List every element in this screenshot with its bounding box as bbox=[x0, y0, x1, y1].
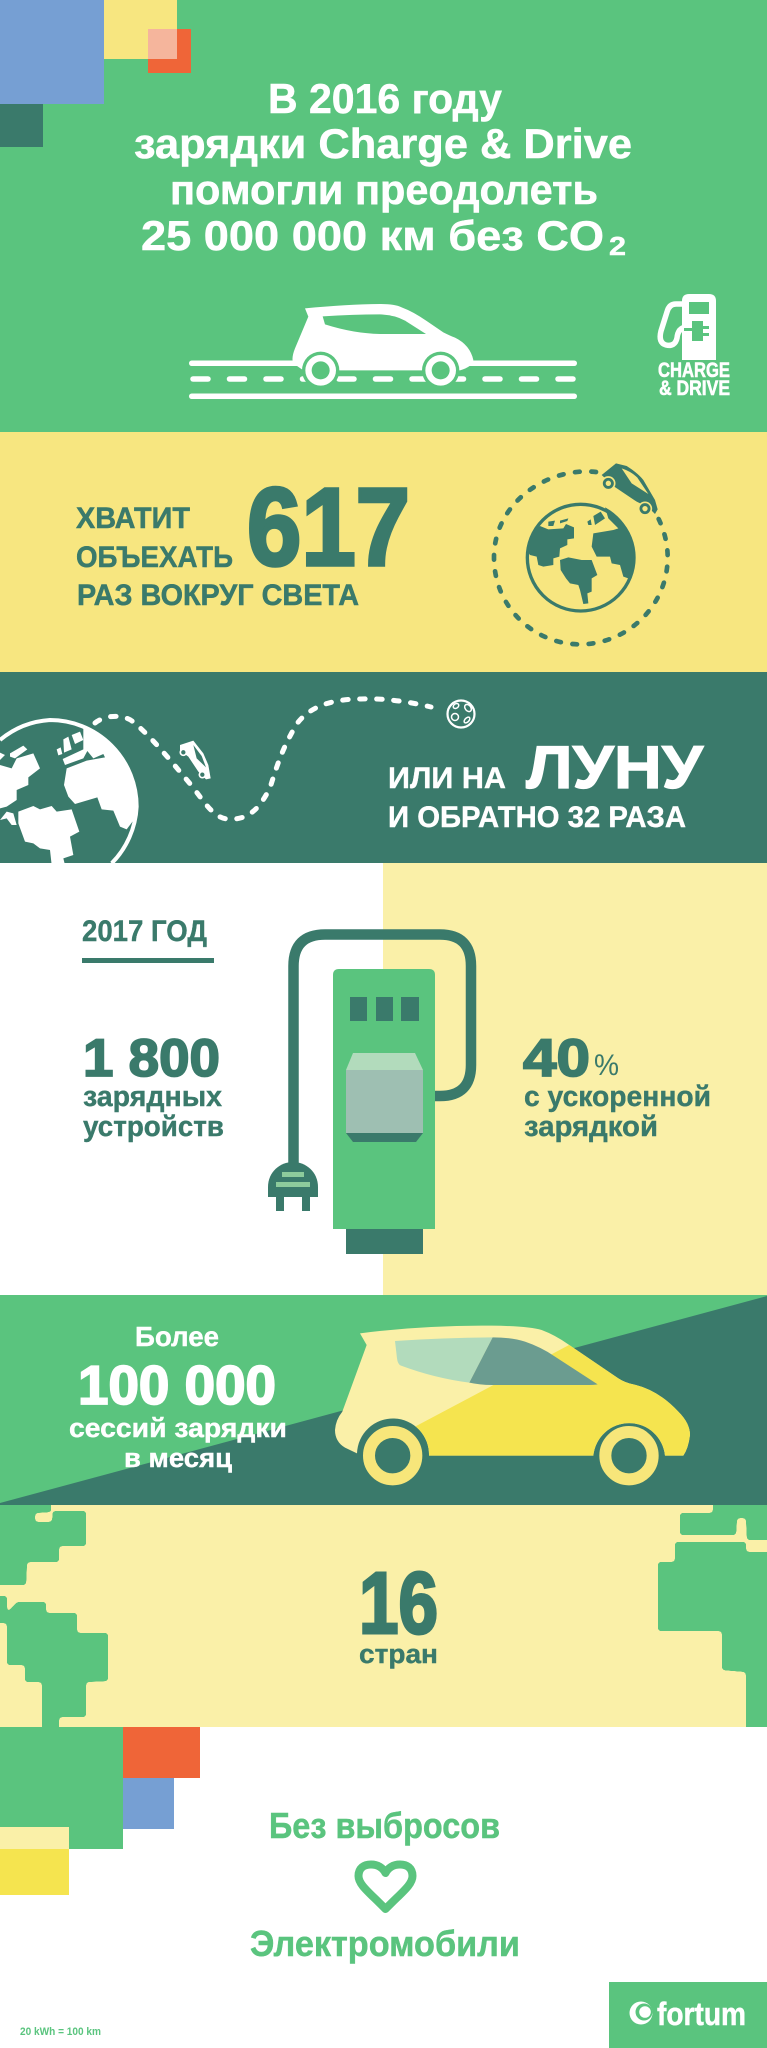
panel: 100 000 sessions bbox=[0, 1295, 767, 1505]
orbit bbox=[494, 471, 668, 644]
stat: 16 countries: стран bbox=[359, 1639, 438, 1669]
stat: 1800 chargers: 1 800 bbox=[83, 1029, 220, 1088]
logo: Charge & Drive: & DRIVE bbox=[659, 377, 730, 400]
stat: 40% fast charging: с ускоренной bbox=[524, 1081, 711, 1113]
icon: heart bbox=[358, 1864, 412, 1909]
icon: large globe bbox=[0, 720, 137, 865]
map blocks: left bbox=[0, 1505, 108, 1727]
station body bbox=[333, 969, 435, 1229]
small car bbox=[602, 463, 658, 515]
logo: Charge & Drive bbox=[658, 294, 730, 400]
panel: to the moon bbox=[0, 672, 767, 865]
text: to the moon and back: ИЛИ НА bbox=[388, 762, 506, 795]
logo: fortum: fortum bbox=[657, 1996, 746, 2032]
text: to the moon and back: ЛУНУ bbox=[526, 734, 704, 801]
stat: sessions per month: 100 000 bbox=[78, 1354, 276, 1416]
plug bbox=[268, 1162, 318, 1197]
panel: 2017 charging stations bbox=[0, 863, 767, 1295]
text: 617 times around the world: РАЗ ВОКРУГ СВЕТА bbox=[77, 579, 359, 612]
text: 617 times around the world bbox=[76, 466, 410, 612]
stat: 16 countries: 16 bbox=[359, 1555, 438, 1652]
socket bbox=[346, 1053, 423, 1070]
road with white car bbox=[189, 304, 577, 399]
slogan: zero emissions: Без выбросов bbox=[269, 1805, 500, 1846]
decorative colour blocks bbox=[0, 0, 191, 147]
decorative colour blocks bbox=[0, 1727, 200, 1895]
text: to the moon and back bbox=[388, 734, 704, 834]
dotted route bbox=[95, 699, 431, 819]
footnote: 20 kWh = 100 km bbox=[20, 2026, 101, 2038]
text: 617 times around the world: 617 bbox=[247, 466, 410, 589]
text: 617 times around the world: ОБЪЕХАТЬ bbox=[76, 541, 233, 574]
stat: sessions per month bbox=[69, 1321, 287, 1473]
stat: 40% fast charging: зарядкой bbox=[524, 1111, 658, 1143]
stat: 1800 chargers: устройств bbox=[83, 1111, 224, 1143]
stat: sessions per month: сессий зарядки bbox=[69, 1413, 287, 1443]
stat: sessions per month: Более bbox=[135, 1321, 219, 1352]
title bbox=[134, 75, 632, 261]
text: to the moon and back: И ОБРАТНО 32 РАЗА bbox=[388, 801, 686, 834]
title: зарядки Charge & Drive bbox=[134, 120, 632, 167]
stat: 40% fast charging: % bbox=[594, 1049, 619, 1082]
logo: Charge & Drive: CHARGE bbox=[658, 359, 730, 382]
heading: 2017 bbox=[82, 915, 214, 963]
text: 617 times around the world: ХВАТИТ bbox=[76, 502, 190, 535]
icon: charging station bbox=[268, 934, 471, 1254]
icon: globe with orbiting car bbox=[494, 463, 668, 644]
stat: 40% fast charging bbox=[523, 1029, 711, 1143]
title: 2 bbox=[609, 231, 626, 261]
icon: small car bbox=[180, 741, 211, 779]
icon: yellow car bbox=[335, 1326, 690, 1479]
stat: 1800 chargers: зарядных bbox=[83, 1081, 222, 1113]
logo: fortum bbox=[609, 1982, 767, 2048]
title: 25 000 000 км без CO bbox=[141, 212, 604, 259]
stat: sessions per month: в месяц bbox=[124, 1443, 232, 1473]
panel: header bbox=[0, 0, 767, 432]
stat: 1800 chargers bbox=[83, 1029, 224, 1143]
panel: 16 countries bbox=[0, 1505, 767, 1727]
icon: moon bbox=[448, 700, 474, 728]
panel: around the world bbox=[0, 432, 767, 672]
heading: 2017: 2017 ГОД bbox=[82, 915, 207, 948]
cable bbox=[294, 934, 471, 1168]
globe bbox=[527, 504, 634, 611]
stat: 40% fast charging: 40 bbox=[523, 1029, 590, 1088]
slogan: electric cars: Электромобили bbox=[250, 1923, 520, 1964]
map blocks: right bbox=[658, 1505, 767, 1727]
title: В 2016 году bbox=[268, 75, 503, 122]
title: помогли преодолеть bbox=[170, 166, 598, 213]
panel: footer bbox=[0, 1727, 767, 2048]
